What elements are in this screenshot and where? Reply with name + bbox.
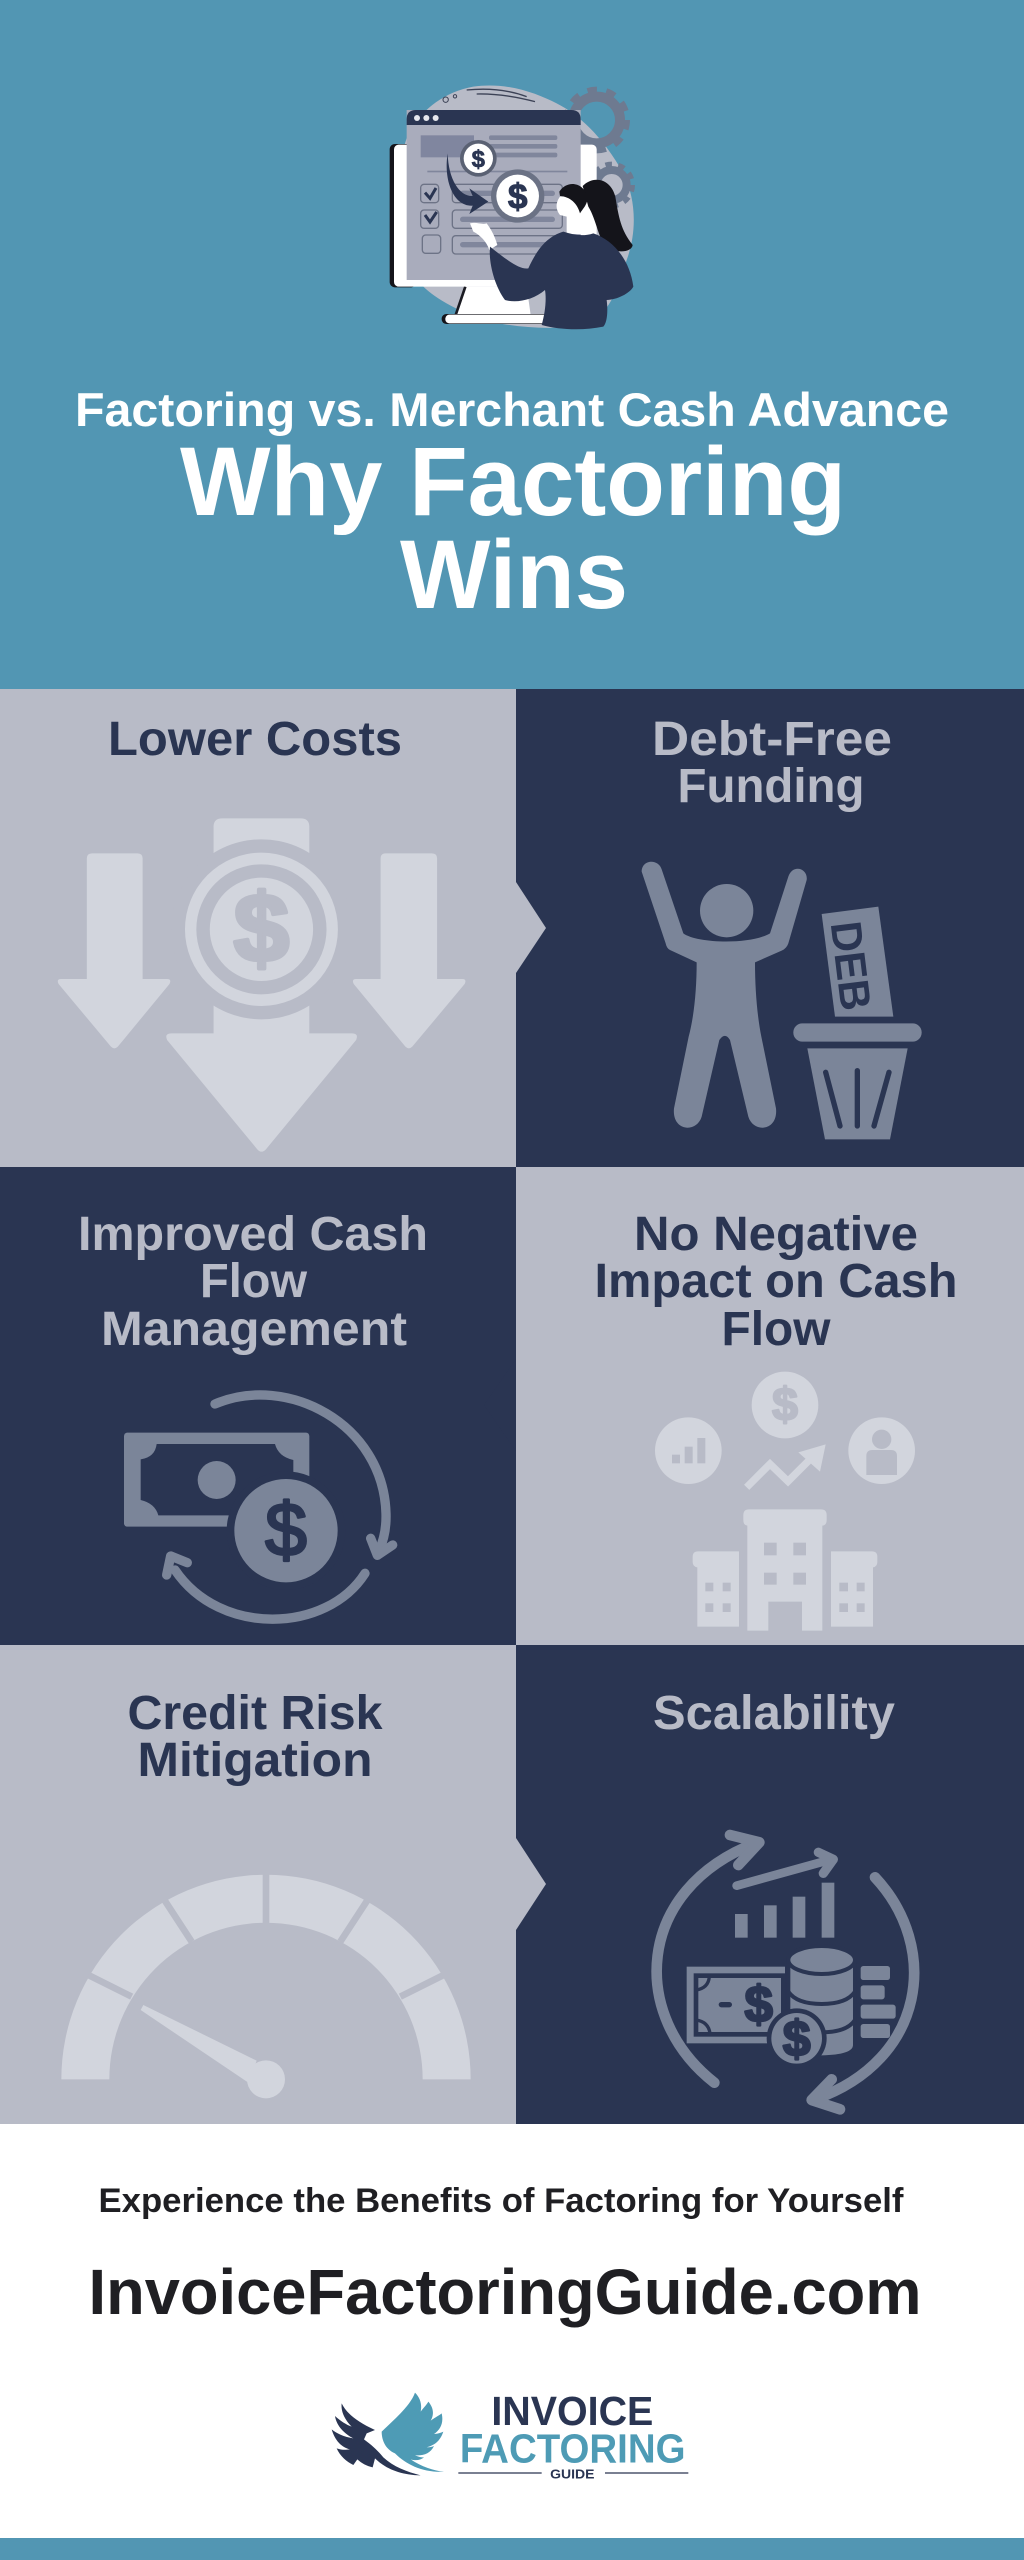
logo bbox=[332, 2388, 688, 2481]
heading: credit risk mitigation: Mitigation bbox=[138, 1734, 372, 1787]
icon: cash cycle bbox=[124, 1395, 393, 1619]
bottom bar bbox=[0, 2538, 1024, 2560]
icon: business growth buildings bbox=[655, 1372, 915, 1631]
heading: improved cash flow management bbox=[78, 1208, 428, 1356]
panel: no negative impact on cash flow bbox=[484, 1167, 1024, 1645]
subtitle line: Factoring vs. Merchant Cash Advance bbox=[75, 384, 949, 437]
icon: cash cycle: $ bbox=[265, 1487, 307, 1571]
heading: improved cash flow management: Management bbox=[101, 1303, 407, 1356]
logo wing: navy bbox=[332, 2403, 421, 2475]
heading: no negative impact on cash flow bbox=[594, 1208, 958, 1356]
panel: credit risk mitigation bbox=[0, 1645, 516, 2124]
heading: improved cash flow management: Flow bbox=[200, 1255, 308, 1308]
panel: improved cash flow management bbox=[0, 1167, 516, 1645]
icon: coin with down arrows: $ bbox=[234, 874, 289, 982]
heading: debt-free funding bbox=[652, 713, 892, 813]
panel: footer bbox=[0, 2124, 1024, 2538]
main title line 1: Why Factoring bbox=[180, 427, 846, 536]
panel: debt-free funding bbox=[516, 689, 1024, 1167]
call to action: Experience the Benefits of Factoring for Yourself bbox=[98, 2182, 904, 2220]
website url: InvoiceFactoringGuide.com bbox=[88, 2256, 922, 2328]
icon: person throwing debt in bin: DEB bbox=[821, 919, 879, 1013]
panel: lower costs bbox=[0, 689, 516, 1167]
title bbox=[75, 384, 949, 629]
icon: scaling money cycle bbox=[657, 1835, 914, 2109]
chevron pointer bbox=[516, 882, 546, 973]
main title line 2: Wins bbox=[400, 520, 628, 629]
heading: debt-free funding: Debt-Free bbox=[652, 713, 892, 766]
heading: lower costs: Lower Costs bbox=[108, 713, 402, 766]
icon: person throwing debt in bin bbox=[642, 862, 922, 1139]
icon: woman at monitor with dollar coins bbox=[390, 85, 634, 329]
heading: credit risk mitigation bbox=[128, 1687, 383, 1787]
heading: debt-free funding: Funding bbox=[678, 760, 864, 813]
chevron pointer bbox=[516, 1838, 546, 1930]
icon: risk gauge bbox=[61, 1870, 471, 2098]
heading: credit risk mitigation: Credit Risk bbox=[128, 1687, 383, 1740]
logo wing: teal bbox=[382, 2393, 444, 2472]
heading: scalability: Scalability bbox=[653, 1687, 895, 1740]
heading: no negative impact on cash flow: Flow bbox=[722, 1303, 831, 1356]
logo: FACTORING bbox=[460, 2426, 685, 2472]
icon: scaling money cycle: $ bbox=[744, 1976, 773, 2033]
icon: scaling money cycle: $ bbox=[783, 2011, 811, 2067]
chevron pointer bbox=[484, 1359, 516, 1451]
icon: business growth buildings: $ bbox=[772, 1378, 798, 1430]
icon: woman at monitor with dollar coins: $ bbox=[508, 178, 528, 217]
heading: improved cash flow management: Improved Cash bbox=[78, 1208, 428, 1261]
header panel bbox=[0, 0, 1024, 689]
panel: scalability bbox=[516, 1645, 1024, 2124]
logo: INVOICE bbox=[491, 2388, 653, 2434]
icon: coin with down arrows bbox=[58, 818, 465, 1152]
logo: GUIDE bbox=[550, 2466, 595, 2481]
heading: no negative impact on cash flow: No Negative bbox=[634, 1208, 918, 1261]
icon: woman at monitor with dollar coins: $ bbox=[472, 146, 485, 173]
heading: no negative impact on cash flow: Impact on Cash bbox=[594, 1255, 958, 1308]
